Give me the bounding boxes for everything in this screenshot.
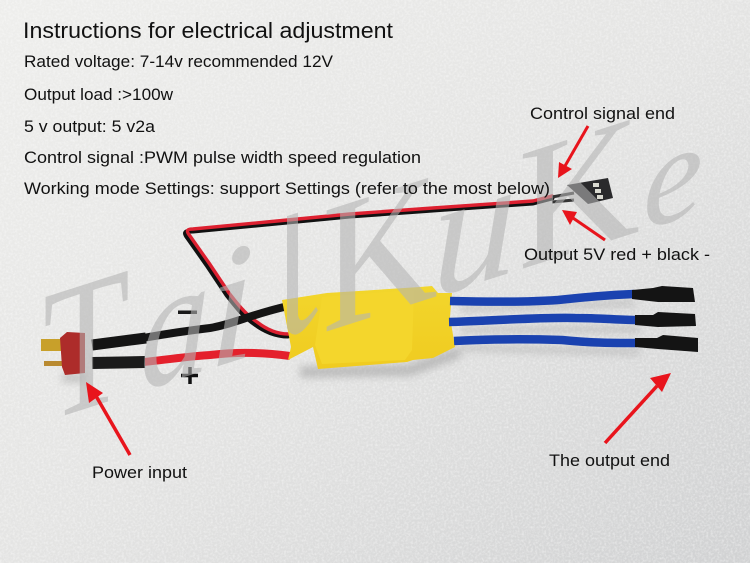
servo wire	[186, 196, 552, 336]
spec: working mode: Working mode Settings: support Settings (refer to the most below)	[24, 180, 550, 198]
arrow: the output end	[605, 373, 671, 443]
callout: the output end: The output end	[549, 452, 670, 470]
spec: control signal: Control signal :PWM pulse width speed regulation	[24, 149, 421, 167]
yellow controller body	[282, 286, 455, 369]
soft shadows under the product	[62, 303, 640, 378]
minus sign	[178, 310, 197, 314]
spec: output load: Output load :>100w	[24, 86, 173, 104]
watermark: TaiKuKe: T	[43, 226, 130, 464]
callout: power input: Power input	[92, 464, 187, 482]
icon: power connector	[41, 332, 85, 375]
watermark: TaiKuKe	[43, 42, 703, 464]
arrow: power input	[86, 382, 130, 455]
watermark: TaiKuKe: u	[432, 119, 517, 335]
watermark: TaiKuKe: e	[643, 91, 703, 260]
spec list	[24, 53, 550, 198]
spec: rated voltage: Rated voltage: 7-14v recommended 12V	[24, 53, 333, 71]
power lead negative	[92, 307, 284, 345]
callout: output 5V: Output 5V red + black -	[524, 246, 710, 264]
icon: servo connector	[552, 178, 613, 204]
arrow: control signal end	[558, 126, 588, 178]
watermark: TaiKuKe: a	[140, 218, 210, 428]
watermark: TaiKuKe: K	[322, 132, 438, 374]
callout: control signal end: Control signal end	[530, 105, 675, 123]
power lead positive	[92, 353, 290, 363]
watermark: TaiKuKe: K	[518, 75, 640, 308]
plus sign	[181, 367, 198, 384]
title: Instructions for electrical adjustment	[23, 18, 393, 43]
bullet connectors	[632, 286, 698, 352]
arrow: output 5V	[562, 210, 605, 240]
blue motor wires	[449, 294, 637, 343]
watermark: TaiKuKe: i	[208, 203, 255, 407]
spec: 5 v output: 5 v output: 5 v2a	[24, 118, 156, 136]
speed controller product	[41, 178, 698, 384]
